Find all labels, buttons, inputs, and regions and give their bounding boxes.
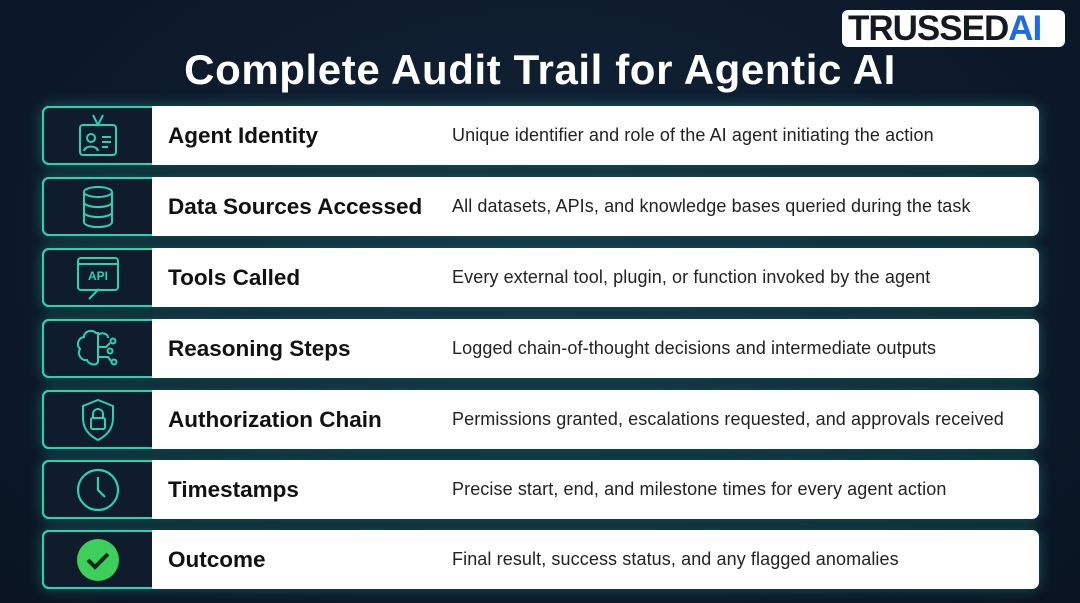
- row: data sources: [42, 177, 1039, 236]
- description: Precise start, end, and milestone times for every agent action: [452, 479, 946, 499]
- label: Timestamps: [168, 477, 299, 502]
- icon: api wrench: API: [88, 268, 108, 282]
- row: agent identity: [42, 106, 1039, 165]
- icon: database: [42, 177, 152, 236]
- description: Logged chain-of-thought decisions and intermediate outputs: [452, 338, 936, 358]
- icon: shield lock: [42, 390, 152, 449]
- label: Authorization Chain: [168, 407, 382, 432]
- description: Permissions granted, escalations requested, and approvals received: [452, 409, 1004, 429]
- row: authorization: [42, 390, 1039, 449]
- title: Complete Audit Trail for Agentic AI: [184, 46, 896, 93]
- description: Final result, success status, and any flagged anomalies: [452, 549, 899, 569]
- label: Data Sources Accessed: [168, 194, 422, 219]
- icon: clock: [42, 460, 152, 519]
- row: outcome: [42, 530, 1039, 589]
- label: Tools Called: [168, 265, 300, 290]
- description: Unique identifier and role of the AI agent initiating the action: [452, 125, 934, 145]
- description: All datasets, APIs, and knowledge bases queried during the task: [452, 196, 971, 216]
- label: Agent Identity: [168, 123, 318, 148]
- description: Every external tool, plugin, or function invoked by the agent: [452, 267, 930, 287]
- icon: check: [42, 530, 152, 589]
- icon: api wrench: [42, 248, 152, 307]
- row: tools: [42, 248, 1039, 307]
- row: reasoning: [42, 319, 1039, 378]
- label: Outcome: [168, 547, 266, 572]
- label: Reasoning Steps: [168, 336, 351, 361]
- row: timestamps: [42, 460, 1039, 519]
- icon: brain: [42, 319, 152, 378]
- icon: id badge: [42, 106, 152, 165]
